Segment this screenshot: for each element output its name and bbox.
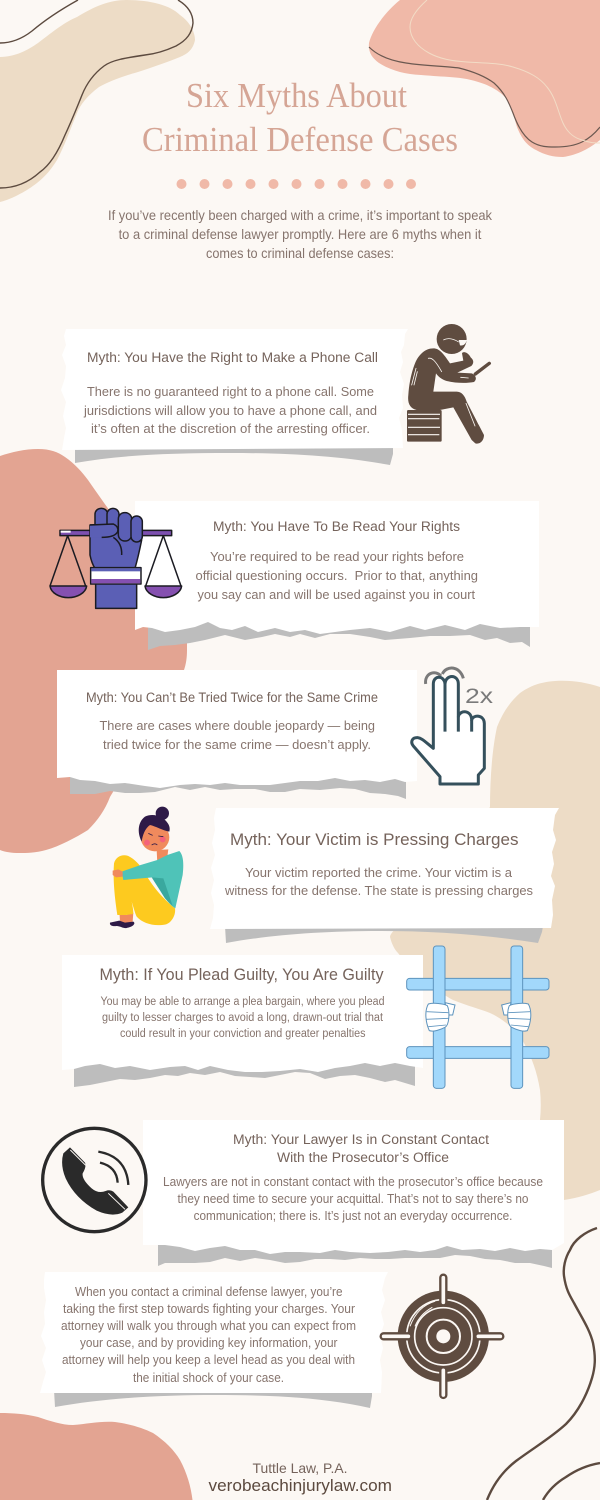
dotted divider	[176, 179, 416, 189]
panel: plead guilty myth	[62, 955, 423, 1087]
panel: closing note	[40, 1272, 388, 1408]
intro text	[108, 207, 493, 261]
body text: taking the first step towards fighting your charges. Your	[63, 1301, 356, 1316]
blob: beige right	[390, 681, 600, 1200]
body text: Lawyers are not in constant contact with the prosecutor’s office because	[163, 1175, 543, 1189]
heading	[233, 1132, 489, 1165]
panel: tried twice myth	[57, 670, 417, 799]
icon: hands gripping jail bars	[407, 946, 549, 1088]
body text	[83, 384, 377, 436]
torn paper shadow	[74, 1060, 415, 1087]
heading: Myth: If You Plead Guilty, You Are Guilty	[100, 966, 384, 984]
body text: tried twice for the same crime — doesn’t apply.	[103, 737, 371, 752]
icon: fist holding scales	[50, 508, 182, 608]
body text: they need time to secure your acquittal. That’s not to say there’s no	[178, 1192, 529, 1206]
blob: beige top left	[0, 0, 195, 202]
paper shadow	[75, 448, 393, 465]
body text	[100, 718, 375, 752]
body text: it’s often at the discretion of the arresting officer.	[91, 421, 370, 436]
paper card	[210, 808, 559, 929]
paper card	[61, 329, 408, 450]
panel: phone call myth	[61, 329, 408, 465]
line: top right dark curve	[369, 47, 600, 147]
icon: double tap hand	[412, 668, 484, 784]
blob: salmon middle left	[0, 449, 187, 853]
icon label: 2x: 2x	[465, 685, 494, 708]
body text	[163, 1175, 543, 1223]
heading: Myth: Your Lawyer Is in Constant Contact	[233, 1132, 489, 1147]
heading: Myth: You Can’t Be Tried Twice for the Same Crime	[86, 690, 378, 705]
torn paper shadow	[70, 775, 406, 799]
body text	[224, 865, 533, 898]
line: top left curves	[0, 0, 193, 188]
body text: official questioning occurs. Prior to that, anything	[196, 568, 478, 583]
body text: Your victim reported the crime. Your victim is a	[245, 865, 513, 880]
footer: firm name and website: Tuttle Law, P.A.	[252, 1460, 348, 1476]
body text: You’re required to be read your rights before	[210, 549, 464, 564]
panel: constant contact myth	[143, 1120, 564, 1268]
body text	[100, 996, 384, 1040]
body text: jurisdictions will allow you to have a phone call, and	[83, 403, 377, 418]
heading: Myth: You Have To Be Read Your Rights	[213, 519, 460, 534]
title: Criminal Defense Cases	[142, 120, 458, 159]
body text: When you contact a criminal defense lawyer, you’re	[75, 1284, 342, 1299]
body text: your case, and by providing key information, your	[80, 1335, 338, 1350]
body text	[196, 549, 478, 602]
paper card	[40, 1272, 388, 1393]
blob: salmon top right	[369, 0, 600, 157]
body text: guilty to lesser charges to avoid a long, drawn-out trial that	[102, 1012, 384, 1024]
line: bottom right curves	[487, 1228, 600, 1500]
body text: could result in your conviction and greater penalties	[120, 1028, 366, 1040]
intro text: If you’ve recently been charged with a crime, it’s important to speak	[108, 207, 493, 223]
heading: Myth: You Have the Right to Make a Phone Call	[87, 350, 378, 365]
panel: read your rights myth	[135, 501, 539, 650]
icon: person reading on books	[407, 324, 489, 444]
heading: Myth: Your Victim is Pressing Charges	[230, 831, 518, 849]
paper shadow	[54, 1390, 372, 1408]
footer: firm name and website: verobeachinjurylaw.com	[208, 1476, 392, 1495]
paper card	[62, 955, 423, 1072]
body text: attorney will help you keep a level head as you deal with	[62, 1352, 355, 1367]
torn paper shadow	[148, 620, 530, 650]
blob: salmon bottom left	[0, 1413, 192, 1500]
paper card	[57, 670, 417, 788]
intro text: to a criminal defense lawyer promptly. Here are 6 myths when it	[119, 226, 481, 242]
paper card	[143, 1120, 564, 1254]
heading: With the Prosecutor’s Office	[277, 1150, 449, 1165]
intro text: comes to criminal defense cases:	[206, 245, 394, 261]
title: Six Myths About	[186, 76, 407, 115]
title	[142, 76, 458, 159]
body text: the initial shock of your case.	[133, 1370, 284, 1385]
body text	[61, 1284, 356, 1385]
icon: crosshair target	[381, 1275, 503, 1398]
body text: communication; there is. It’s just not an everyday occurrence.	[194, 1209, 512, 1223]
icon: sad woman hugging knees	[110, 807, 183, 928]
footer: firm name and website	[208, 1460, 392, 1495]
body text: There is no guaranteed right to a phone call. Some	[87, 384, 374, 399]
body text: attorney will walk you through what you can expect from	[61, 1318, 356, 1333]
body text: you say can and will be used against you in court	[198, 587, 475, 602]
line: top right light curve	[410, 0, 600, 143]
paper shadow	[225, 926, 543, 943]
torn paper shadow	[158, 1240, 552, 1268]
paper card	[135, 501, 539, 634]
panel: pressing charges myth	[210, 808, 559, 943]
body text: There are cases where double jeopardy — being	[100, 718, 375, 733]
body text: witness for the defense. The state is pressing charges	[224, 883, 533, 898]
body text: You may be able to arrange a plea bargain, where you plead	[100, 996, 384, 1008]
icon: telephone in circle	[43, 1128, 146, 1232]
